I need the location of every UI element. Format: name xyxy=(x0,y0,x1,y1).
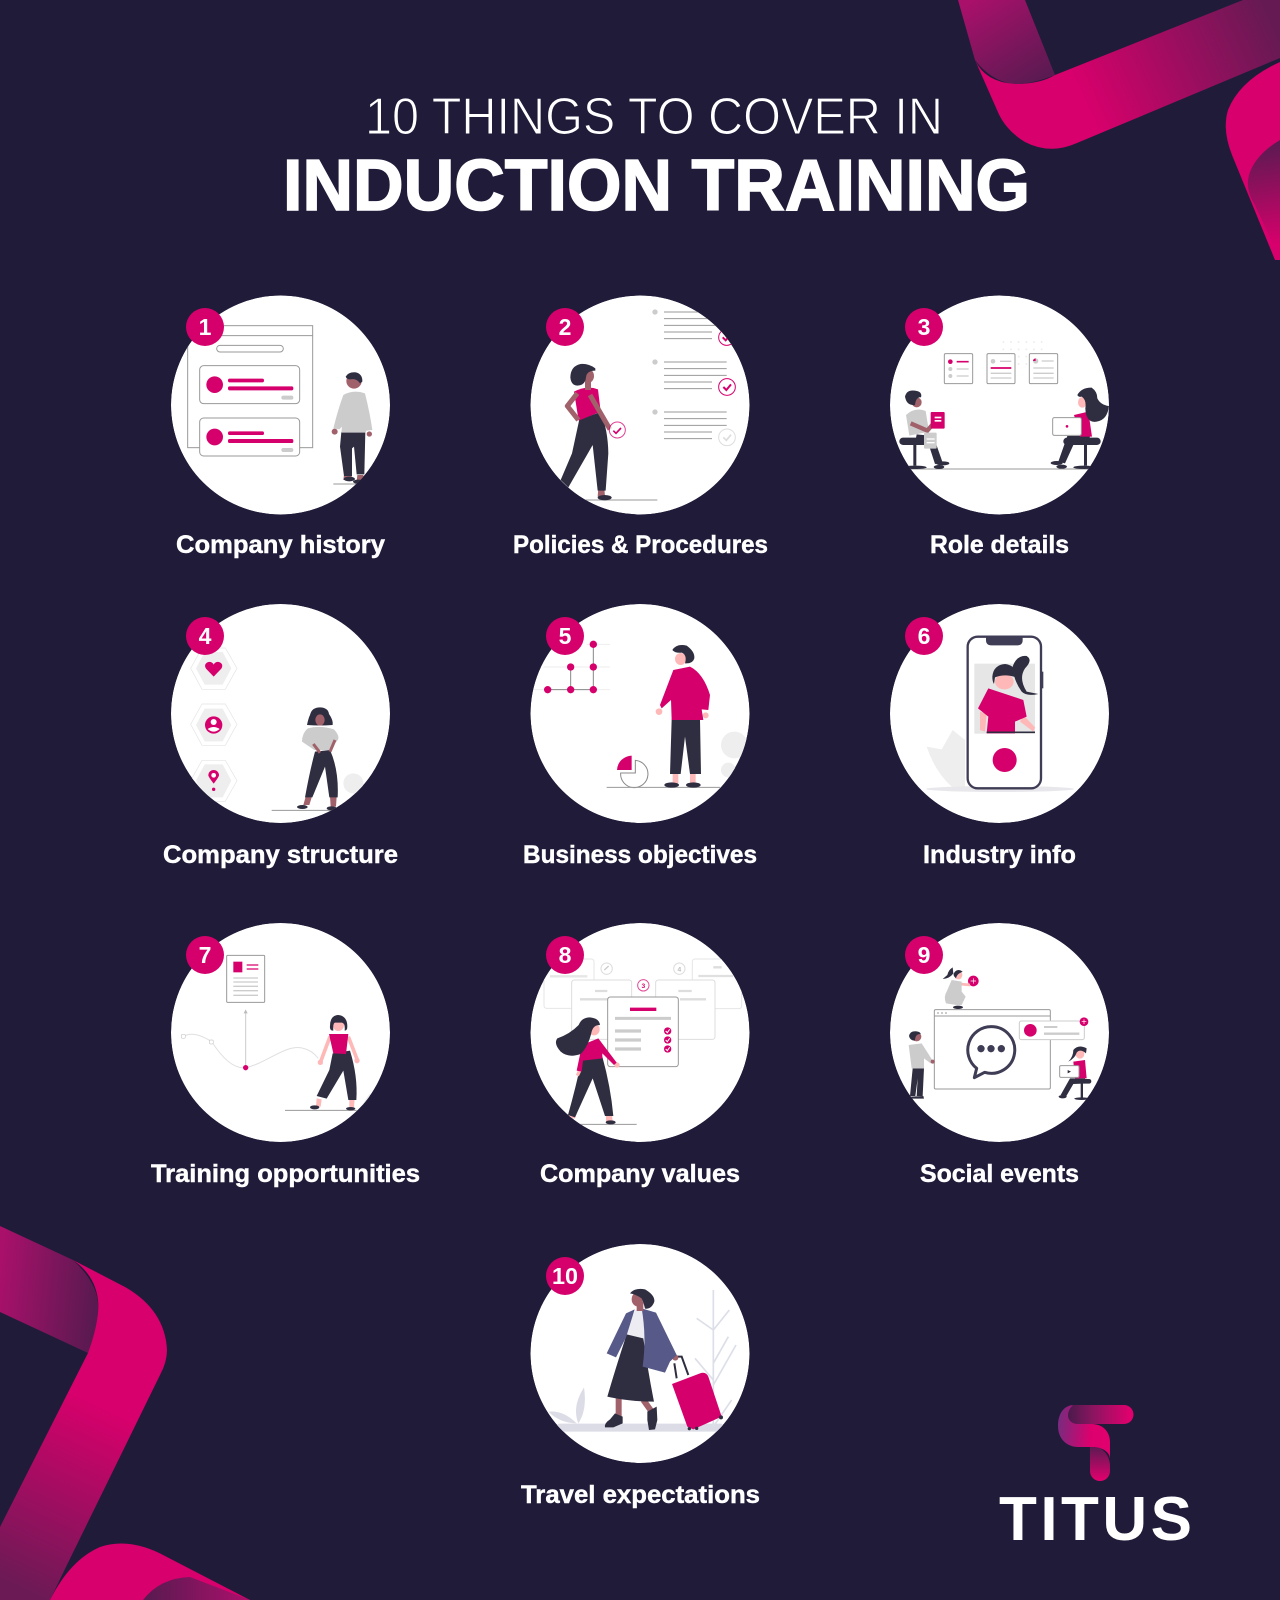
title line 1: 10 THINGS TO COVER IN xyxy=(365,88,943,146)
label: Business objectives xyxy=(523,841,757,869)
badge 6: 6 xyxy=(918,623,930,649)
panel: 6 industry info xyxy=(890,604,1109,869)
title line 2: INDUCTION TRAINING xyxy=(283,146,1030,226)
label: Training opportunities xyxy=(151,1160,420,1188)
badge 7: 7 xyxy=(199,942,211,968)
panel: 3 role details xyxy=(890,296,1109,559)
illustration: phone video call xyxy=(890,604,1109,823)
badge 4 xyxy=(186,617,224,655)
badge 1: 1 xyxy=(199,314,212,340)
illustration: graph, pie chart and man xyxy=(530,604,750,823)
label: Social events xyxy=(920,1160,1079,1188)
label: Company history xyxy=(176,531,385,559)
illustration: chat window and people xyxy=(890,923,1109,1142)
badge 10: 10 xyxy=(552,1263,578,1289)
label: Company structure xyxy=(163,841,398,869)
badge 6 xyxy=(905,617,943,655)
logo: titus xyxy=(999,1405,1192,1554)
illustration: hexagons and woman xyxy=(171,604,390,823)
logo wordmark: TITUS xyxy=(999,1485,1192,1554)
panel: 5 business objectives xyxy=(523,604,757,869)
badge 5 xyxy=(546,617,584,655)
badge 7 xyxy=(186,936,224,974)
badge 4: 4 xyxy=(199,623,212,649)
panel: 7 training opportunities xyxy=(151,923,420,1188)
illustration: woman with suitcase xyxy=(530,1244,750,1463)
ribbon: top right xyxy=(958,0,1280,260)
badge 9: 9 xyxy=(918,942,930,968)
badge 3: 3 xyxy=(918,314,930,340)
panel: 8 company values xyxy=(530,923,750,1188)
panel: 1 company history xyxy=(171,296,390,559)
panel: 4 company structure xyxy=(163,604,398,869)
badge 9 xyxy=(905,936,943,974)
badge 3 xyxy=(905,308,943,346)
title xyxy=(283,88,1030,226)
panel: 2 policies and procedures xyxy=(513,296,768,559)
badge 10 xyxy=(546,1257,584,1295)
illustration: woman and checklist xyxy=(530,296,750,514)
badge 2 xyxy=(546,308,584,346)
illustration: web page and man xyxy=(171,296,390,514)
panel: 10 travel expectations xyxy=(521,1244,760,1509)
ribbon: bottom left xyxy=(0,1226,250,1600)
label: Policies & Procedures xyxy=(513,531,768,559)
badge 1 xyxy=(186,308,224,346)
logo mark xyxy=(1058,1405,1134,1481)
label: Travel expectations xyxy=(521,1481,760,1509)
sitting girl xyxy=(1059,1047,1091,1100)
illustration: woman and step cards xyxy=(530,923,750,1142)
illustration: woman and step cards: 3 xyxy=(641,983,645,990)
badge 8 xyxy=(546,936,584,974)
illustration: career path and woman xyxy=(171,923,390,1142)
label: Industry info xyxy=(923,841,1076,869)
illustration: two people seated with cards xyxy=(890,296,1109,514)
squatting girl xyxy=(943,967,979,1009)
badge 2: 2 xyxy=(559,314,571,340)
standing man xyxy=(909,1031,935,1099)
label: Role details xyxy=(930,531,1069,559)
label: Company values xyxy=(540,1160,740,1188)
badge 5: 5 xyxy=(559,623,572,649)
illustration: woman and step cards: 4 xyxy=(677,966,681,973)
badge 8: 8 xyxy=(559,942,572,968)
panel: 9 social events xyxy=(890,923,1109,1188)
